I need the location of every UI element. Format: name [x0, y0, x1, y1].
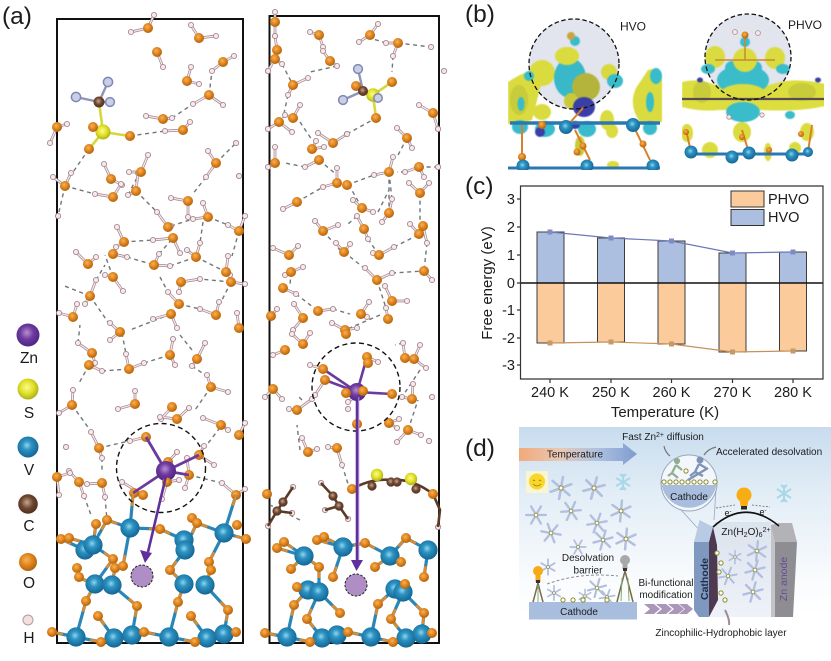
- temperature arrow: Temperature: [547, 450, 604, 460]
- label: PHVO: PHVO: [788, 18, 822, 32]
- y axis tick labels: -1: [502, 303, 515, 319]
- y axis tick labels: -2: [502, 331, 515, 347]
- water molecules and hydrogen bonds: [265, 12, 444, 527]
- y axis tick labels: 2: [507, 220, 515, 236]
- x axis title: Temperature (K): [611, 404, 719, 421]
- caption: fast Zn diffusion: diffusion: [664, 432, 704, 443]
- solvated Zn ion with dashed solvation shell: [312, 343, 400, 431]
- modification layer: carbon chain and sulfur: [267, 469, 440, 527]
- electron labels and arrows: e: [759, 507, 765, 517]
- barrier dashed arrow: [547, 575, 618, 584]
- panel (c): free energy bar chart: [479, 186, 823, 421]
- y axis tick labels: 0: [507, 276, 515, 292]
- panel (d): desolvation schematic: modification: [639, 590, 693, 601]
- label (a): (a): [2, 3, 32, 30]
- curved pointers to captions: [664, 446, 716, 456]
- magnified cathode interface: [661, 455, 717, 535]
- legend: C: C: [23, 518, 35, 535]
- panel (d): desolvation schematic: [519, 427, 831, 639]
- panel (b): PHVO charge density: [672, 14, 825, 164]
- x axis tick labels: 280 K: [774, 385, 812, 401]
- external circuit arc: [713, 512, 779, 527]
- y axis tick labels: 1: [507, 248, 515, 264]
- zero line: [520, 282, 823, 284]
- charge density lobes, PHVO: [681, 37, 825, 161]
- y axis tick labels: 3: [507, 192, 515, 208]
- Zn vacancy target: [345, 574, 367, 596]
- chevron arrows: [644, 604, 693, 614]
- formula: 2+: [763, 527, 771, 534]
- icon: runner: [668, 459, 682, 478]
- caption: accelerated desolvation: Accelerated desolvation: [716, 447, 822, 458]
- simulation box frame: [57, 19, 243, 643]
- slab: vanadium oxide layers: [52, 495, 246, 642]
- legend: Zn: Zn: [20, 350, 38, 367]
- Zn vacancy target: [131, 565, 153, 587]
- panel (b): HVO charge density: [505, 19, 662, 172]
- arrow: Zn diffusion into cathode: [351, 397, 363, 571]
- y axis title: Free energy (eV): [479, 226, 496, 340]
- caption: bi-functional modification: Bi-functional: [638, 578, 694, 589]
- PHVO trend line and markers: [548, 340, 796, 354]
- icon: unlit bulb on large barrier: [617, 555, 633, 602]
- simulation box frame: [270, 16, 439, 643]
- icon: sun: [526, 471, 548, 493]
- solvated Zn ions: [524, 475, 636, 607]
- panel background: [519, 427, 831, 617]
- legend: S: [18, 378, 38, 422]
- Zn ions on surface: [662, 469, 717, 484]
- x axis tick labels: 250 K: [592, 385, 630, 401]
- axes frame and ticks: [517, 186, 823, 383]
- zincophilic-hydrophobic layer: [709, 527, 718, 617]
- pointer to layer: [725, 610, 729, 625]
- caption: zincophilic-hydrophobic layer: Zincophilic-Hydrophobic layer: [655, 628, 787, 639]
- icon: skater: [688, 458, 708, 480]
- electron labels and arrows: -: [765, 508, 767, 514]
- solvated Zn ion with dashed solvation shell: [116, 424, 206, 512]
- dashed circle highlight, HVO: [529, 19, 619, 109]
- electron labels and arrows: e: [724, 508, 730, 518]
- legend: S: S: [24, 405, 34, 422]
- panel (a): right simulation cell: [265, 12, 444, 643]
- battery cell: [694, 512, 797, 617]
- x axis tick labels: 240 K: [531, 385, 569, 401]
- icon: glowing bulb: [736, 488, 752, 510]
- cathode slab (left): [529, 602, 637, 620]
- y axis tick labels: [502, 192, 515, 374]
- caption: fast Zn diffusion: 2+: [656, 432, 664, 439]
- formula: O): [748, 527, 759, 538]
- HVO trend line and markers: [548, 230, 796, 256]
- legend: O: O: [23, 575, 35, 592]
- magnified cathode interface: Cathode: [670, 492, 708, 503]
- electrolyte chamber: [709, 522, 775, 617]
- chart legend: HVO: [768, 210, 799, 226]
- PHVO bars: [537, 283, 806, 352]
- triflate anion: [339, 65, 392, 118]
- electron labels and arrows: [716, 505, 770, 518]
- water molecules and hydrogen bonds: [50, 15, 245, 520]
- atoms and bonds, PHVO: [672, 30, 825, 163]
- atoms and bonds, HVO: [505, 107, 660, 172]
- legend: H: H: [23, 630, 35, 647]
- x axis tick labels: 260 K: [653, 385, 691, 401]
- charge density lobes, HVO: [508, 32, 662, 169]
- legend: O: [19, 553, 37, 592]
- x axis tick labels: 270 K: [714, 385, 752, 401]
- triflate anion: [71, 77, 130, 149]
- Zn anode block: Zn anode: [778, 557, 790, 601]
- formula: Zn(H: [721, 527, 744, 538]
- caption: desolvation barrier: Desolvation: [562, 553, 614, 564]
- dashed circle highlight, PHVO: [705, 14, 791, 86]
- surface Zn ions: [561, 598, 609, 602]
- x axis tick labels: [531, 385, 812, 401]
- label: HVO: HVO: [620, 20, 646, 34]
- legend: C: [18, 494, 38, 535]
- icon: snowflake right: [777, 485, 791, 502]
- caption: fast Zn diffusion: Fast Zn: [622, 432, 656, 443]
- panel (a): left simulation cell: [50, 15, 246, 643]
- panel (d): desolvation schematic: barrier: [574, 566, 603, 576]
- legend: V: V: [24, 462, 35, 479]
- electrolyte ions: [715, 540, 766, 604]
- label (b): (b): [465, 1, 495, 28]
- legend: V: [18, 436, 38, 479]
- formula: 2: [744, 532, 748, 539]
- arrow: Zn diffusion into cathode: [140, 476, 166, 563]
- temperature arrow: [519, 443, 637, 465]
- icon: snowflake: [616, 474, 630, 490]
- formula: 6: [759, 532, 763, 539]
- y axis tick labels: -3: [502, 358, 515, 374]
- cathode block: Cathode: [699, 558, 711, 600]
- label (d): (d): [465, 435, 495, 462]
- legend: Zn: [16, 324, 40, 367]
- label (c): (c): [465, 173, 494, 200]
- icon: lit bulb on small barrier: [533, 566, 543, 602]
- element legend: [16, 324, 40, 647]
- HVO bars: [537, 232, 806, 283]
- slab: vanadium oxide layers: [265, 537, 432, 642]
- chart legend: [731, 191, 809, 226]
- electron labels and arrows: -: [730, 509, 732, 515]
- legend: H: [23, 615, 35, 647]
- cathode slab (left): Cathode: [560, 607, 598, 618]
- chart legend: PHVO: [768, 192, 809, 208]
